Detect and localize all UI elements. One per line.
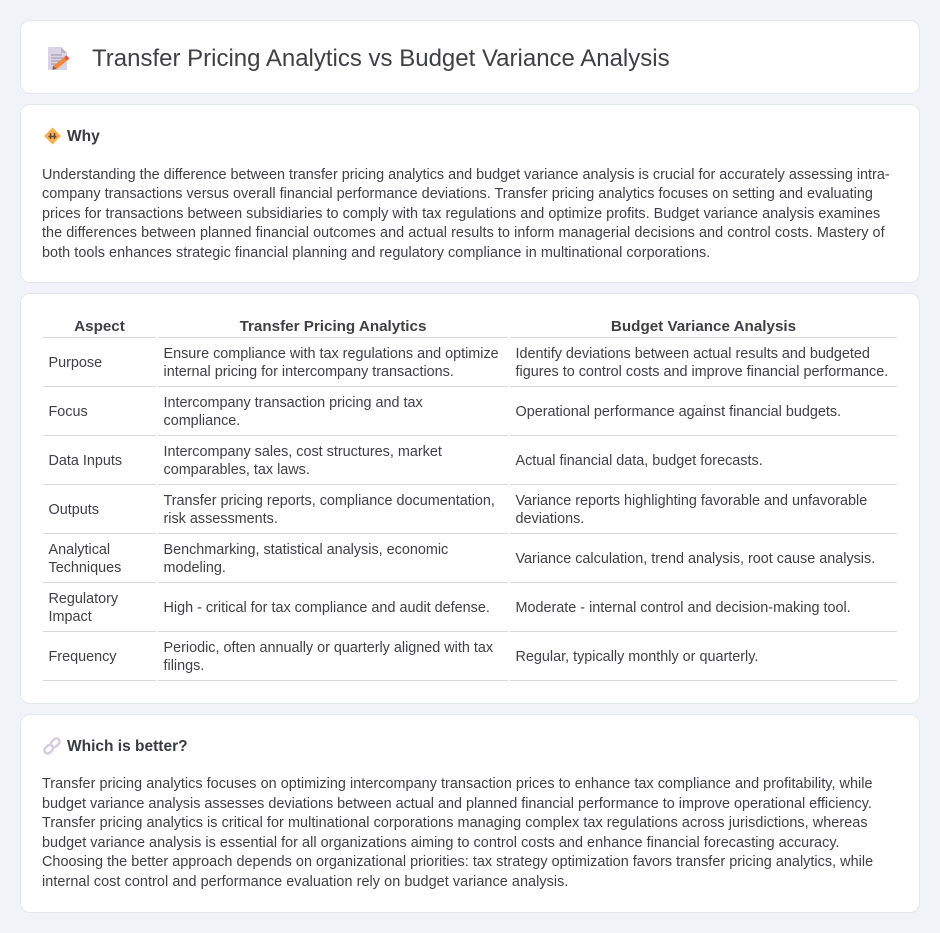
cell (510, 339, 897, 387)
text block: which is better paragraph: Transfer pricing analytics focuses on optimizing intercompany transaction prices to enhance tax compliance and profitability, while (42, 776, 873, 792)
cell: Intercompany transaction pricing and tax (164, 395, 423, 411)
row label: focus (43, 388, 156, 436)
cell: Intercompany sales, cost structures, market (164, 444, 442, 460)
cell: compliance. (164, 413, 240, 429)
row label: regulatory impact (43, 584, 156, 632)
cell: Periodic, often annually or quarterly aligned with tax (164, 640, 493, 656)
cell (158, 535, 508, 583)
row label: analytical techniques (43, 535, 156, 583)
row label: data inputs: Data Inputs (48, 453, 122, 469)
cell: Variance reports highlighting favorable and unfavorable (516, 493, 867, 509)
cell: Ensure compliance with tax regulations and optimize (164, 346, 499, 362)
text block: why paragraph (42, 166, 890, 261)
panel: why card (20, 104, 920, 283)
cell (510, 584, 897, 632)
row label: analytical techniques: Techniques (48, 560, 121, 576)
cell: High - critical for tax compliance and audit defense. (164, 600, 490, 616)
cell: Identify deviations between actual results and budgeted (516, 346, 870, 362)
row label: regulatory impact: Regulatory (48, 591, 118, 607)
cell: Operational performance against financial budgets. (516, 404, 841, 420)
text block: why paragraph: prices for transactions between subsidiaries to comply with tax regulations and optimize profits. Budget variance analysis examines (42, 206, 880, 222)
cell: Benchmarking, statistical analysis, economic (164, 542, 448, 558)
cell (158, 388, 508, 436)
text block: why paragraph: the differences between planned financial outcomes and actual results to inform managerial decisions and control costs. Mastery of (42, 225, 885, 241)
cell (158, 339, 508, 387)
row label: frequency (43, 633, 156, 681)
panel: header card (20, 20, 920, 94)
column header: budget variance analysis (510, 316, 897, 338)
cell (158, 437, 508, 485)
column header: budget variance analysis: Budget Variance Analysis (611, 318, 796, 335)
row label: outputs (43, 486, 156, 534)
row label: frequency: Frequency (48, 649, 116, 665)
row label: analytical techniques: Analytical (48, 542, 110, 558)
column header: transfer pricing analytics (158, 316, 508, 338)
cell: Variance calculation, trend analysis, root cause analysis. (516, 551, 875, 567)
cell: internal pricing for intercompany transactions. (164, 364, 454, 380)
text block: which is better paragraph (42, 776, 873, 890)
cell: Moderate - internal control and decision-making tool. (516, 600, 851, 616)
cell: risk assessments. (164, 511, 278, 527)
cell (510, 437, 897, 485)
cell: deviations. (516, 511, 584, 527)
row label: regulatory impact: Impact (48, 609, 92, 625)
panel: which is better card (20, 714, 920, 913)
text block: why paragraph: both tools enhances strategic financial planning and regulatory compliance in multinational corporations. (42, 245, 710, 261)
text block: why paragraph: Understanding the difference between transfer pricing analytics and budget variance analysis is crucial for accurately assessing intra- (42, 166, 890, 182)
icon: chain link (43, 737, 61, 755)
cell: Regular, typically monthly or quarterly. (516, 649, 758, 665)
cell: Actual financial data, budget forecasts. (516, 453, 763, 469)
cell: filings. (164, 658, 204, 674)
heading: why: Why (67, 128, 100, 145)
heading: which is better: Which is better? (67, 738, 188, 755)
panel: comparison table card (20, 293, 920, 704)
column header: transfer pricing analytics: Transfer Pricing Analytics (240, 318, 426, 335)
row label: focus: Focus (48, 404, 88, 420)
cell (510, 486, 897, 534)
text block: which is better paragraph: budget variance analysis assesses deviations between actual and planned financial performance to improve operational efficiency. (42, 796, 872, 812)
row label: purpose: Purpose (48, 355, 102, 371)
cell: figures to control costs and improve financial performance. (516, 364, 888, 380)
cell (510, 633, 897, 681)
text block: which is better paragraph: internal cost control and performance evaluation rely on budget variance analysis. (42, 874, 569, 890)
icon: document with pencil (48, 47, 70, 70)
text block: which is better paragraph: budget variance analysis is essential for all organizations aiming to control costs and enhance financial forecasting accuracy. (42, 835, 840, 851)
text block: why paragraph: company transactions versus overall financial performance deviations. Transfer pricing analytics focuses on setting and evaluating (42, 186, 873, 202)
column header: aspect (43, 316, 156, 338)
icon: diamond sign (44, 128, 61, 144)
row label: purpose (43, 339, 156, 387)
cell: Transfer pricing reports, compliance documentation, (164, 493, 495, 509)
cell (510, 388, 897, 436)
title: Transfer Pricing Analytics vs Budget Variance Analysis (92, 45, 670, 72)
column header: aspect: Aspect (74, 318, 125, 335)
cell: modeling. (164, 560, 226, 576)
text block: which is better paragraph: Choosing the better approach depends on organizational priorities: tax strategy optimization favors transfer pricing analytics, while (42, 854, 873, 870)
cell (510, 535, 897, 583)
cell (158, 486, 508, 534)
row label: outputs: Outputs (48, 502, 99, 518)
text block: which is better paragraph: Transfer pricing analytics is critical for multinational corporations managing complex tax regulations across jurisdictions, whereas (42, 815, 868, 831)
cell: comparables, tax laws. (164, 462, 310, 478)
cell (158, 584, 508, 632)
row label: data inputs (43, 437, 156, 485)
cell (158, 633, 508, 681)
